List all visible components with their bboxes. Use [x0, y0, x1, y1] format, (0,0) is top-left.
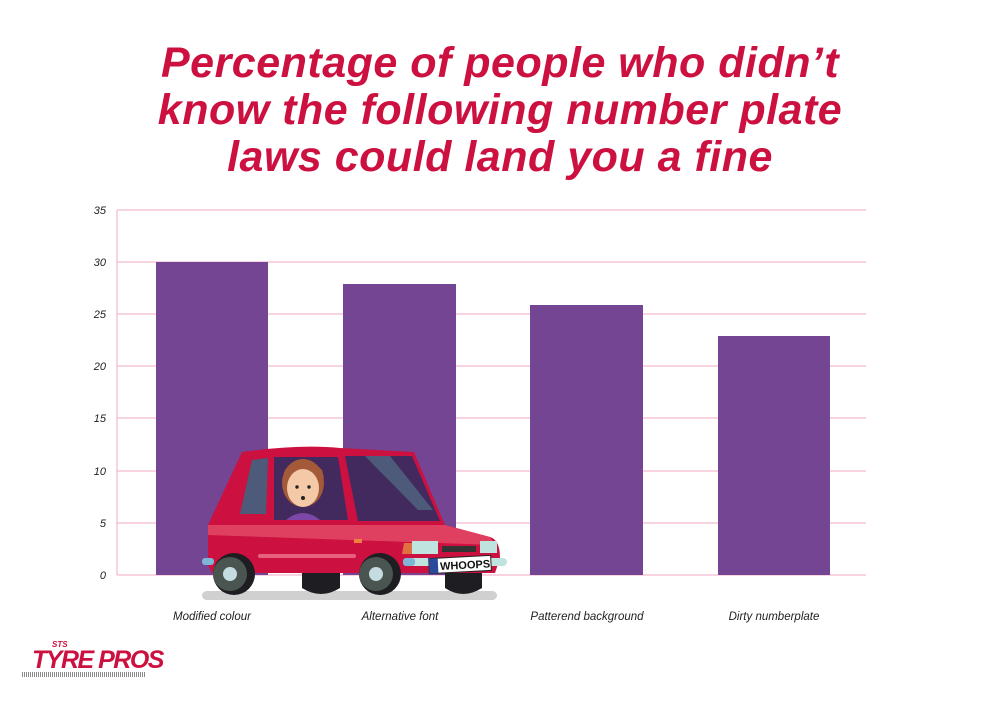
icon: car with driver	[202, 446, 507, 600]
x axis labels	[173, 611, 819, 623]
bars	[156, 262, 830, 575]
y axis labels: 15	[94, 413, 107, 425]
y axis labels: 35	[94, 205, 107, 217]
plate: WHOOPS	[440, 558, 490, 573]
y axis labels	[93, 205, 107, 582]
y axis labels: 20	[93, 361, 107, 373]
y axis labels: 25	[93, 309, 107, 321]
y axis labels: 30	[94, 257, 107, 269]
driver	[282, 459, 324, 507]
title	[158, 39, 842, 181]
logo: STS Tyre Pros: STS	[52, 640, 68, 649]
logo: STS Tyre Pros: TYRE PROS	[32, 646, 163, 674]
y axis labels: 0	[100, 570, 107, 582]
title: Percentage of people who didn’t	[161, 39, 839, 87]
x axis labels: Dirty numberplate	[729, 611, 819, 623]
y axis labels: 5	[100, 518, 107, 530]
logo: STS Tyre Pros	[22, 640, 164, 677]
x axis labels: Patterend background	[530, 611, 644, 623]
y axis labels: 10	[94, 466, 107, 478]
x axis labels: Modified colour	[173, 611, 252, 623]
title: know the following number plate	[158, 86, 842, 134]
wheels	[213, 553, 255, 595]
plate	[429, 555, 491, 574]
x axis labels: Alternative font	[361, 611, 439, 623]
title: laws could land you a fine	[227, 133, 773, 181]
